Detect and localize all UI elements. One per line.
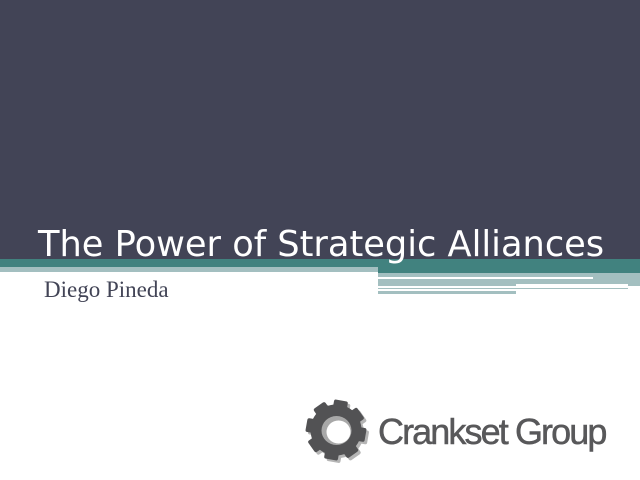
teal band with stripes [0,259,640,294]
title: The Power of Strategic Alliances [38,224,604,265]
icon: gear logo [306,400,369,463]
subtitle: author name: Diego Pineda [44,277,169,302]
panel: dark title background [0,0,640,259]
logo wordmark: Crankset Group [378,411,606,452]
